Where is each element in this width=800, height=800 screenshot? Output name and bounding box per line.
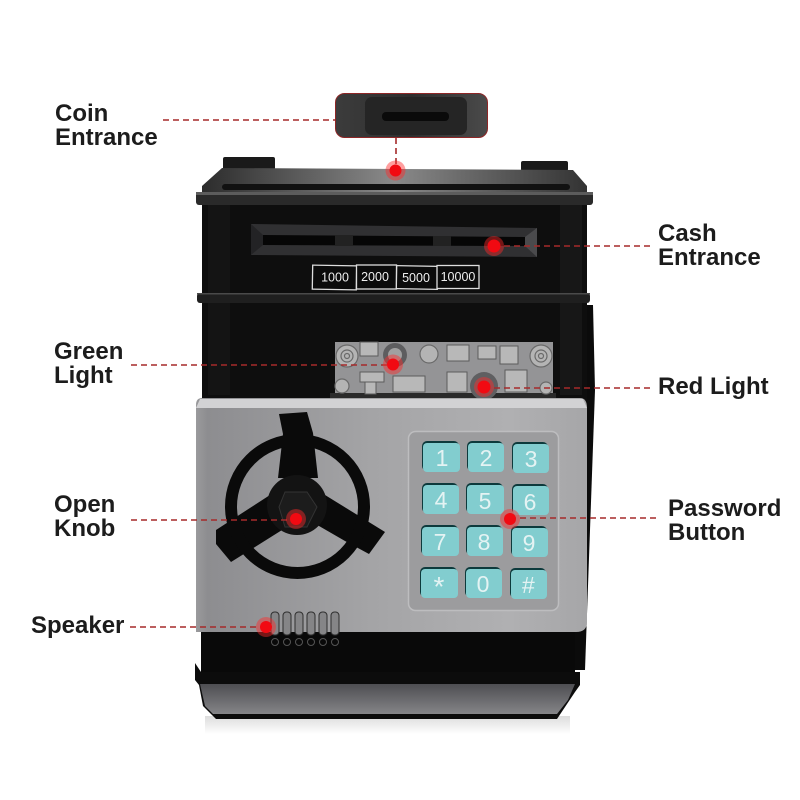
label: speaker: Speaker <box>31 612 124 639</box>
keypad: * <box>434 571 445 602</box>
leader lines <box>130 120 660 627</box>
keypad: 5 <box>479 488 491 514</box>
denomination labels: 5000 <box>402 271 430 285</box>
keypad: # <box>522 572 536 598</box>
keypad: 0 <box>477 571 489 597</box>
label: open knob: Open <box>54 491 115 518</box>
label: green light: Light <box>54 362 113 389</box>
denomination labels: 2000 <box>361 270 389 284</box>
keypad: 2 <box>480 445 492 471</box>
lower black section <box>201 625 575 675</box>
silver door <box>196 398 587 632</box>
upper black box <box>202 196 587 400</box>
denomination labels: 10000 <box>441 270 475 284</box>
label: cash entrance: Entrance <box>658 244 761 271</box>
keypad: 7 <box>434 529 446 555</box>
cash slot <box>251 224 537 257</box>
label: cash entrance: Cash <box>658 220 717 247</box>
keypad: 4 <box>435 487 448 513</box>
speaker <box>271 612 339 646</box>
label: coin entrance: Coin <box>55 100 108 127</box>
open knob <box>216 412 385 573</box>
denomination labels: 1000 <box>321 270 349 284</box>
safe body <box>195 157 595 719</box>
top clips <box>223 157 568 171</box>
keypad: 9 <box>523 530 535 556</box>
lid top <box>202 168 587 194</box>
coin entrance close-up <box>336 94 488 138</box>
keypad: 6 <box>524 489 536 515</box>
label: open knob: Knob <box>54 515 115 542</box>
keypad: 1 <box>436 445 448 471</box>
denomination labels <box>312 265 479 290</box>
marker dots <box>256 160 520 637</box>
label: green light: Green <box>54 338 123 365</box>
label: password button: Password <box>668 495 781 522</box>
keypad: 3 <box>525 446 537 472</box>
floor shadow <box>205 716 570 734</box>
keypad <box>408 432 558 610</box>
lid lip <box>196 192 593 205</box>
middle band <box>197 293 590 303</box>
grey base <box>195 663 580 719</box>
side latch <box>575 305 595 670</box>
metal plate with lights <box>330 342 556 400</box>
label: password button: Button <box>668 519 745 546</box>
keypad: 8 <box>478 529 490 555</box>
label: coin entrance: Entrance <box>55 124 158 151</box>
label: red light: Red Light <box>658 373 769 400</box>
